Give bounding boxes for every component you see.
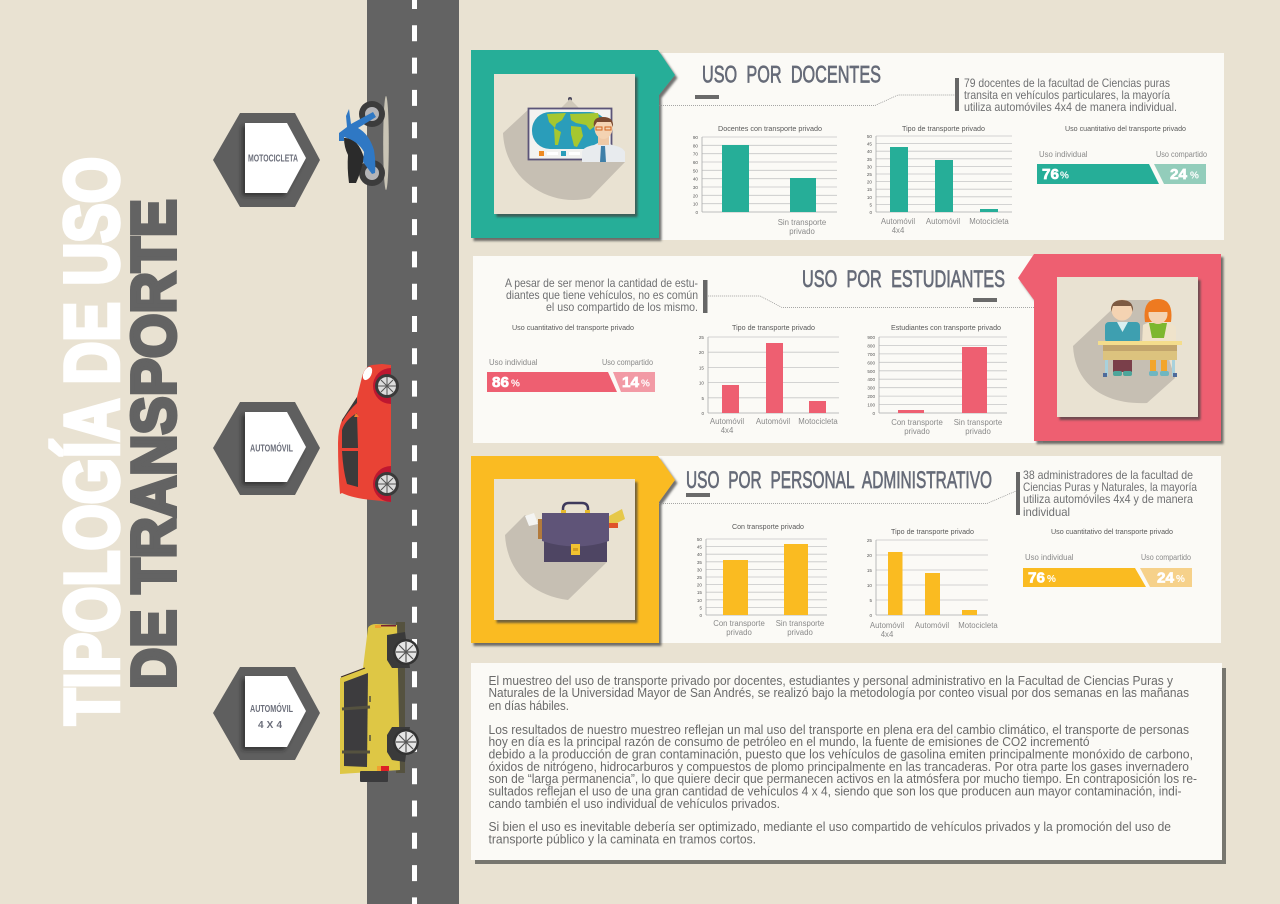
bar chart: tipo de transporte privado: Automóvil: [915, 621, 949, 630]
share bar: uso cuantitativo: 14: [622, 375, 639, 391]
text block: individual: [1023, 505, 1070, 519]
bar chart: estudiantes con transporte privado: Sin transporte: [954, 418, 1002, 427]
bar chart: tipo de transporte privado: Automóvil: [926, 217, 960, 226]
text block: transita en vehículos particulares, la mayoría: [964, 88, 1170, 102]
bar chart: estudiantes con transporte privado: 500: [867, 369, 875, 374]
bar chart: estudiantes con transporte privado: 700: [867, 352, 875, 357]
share bar: uso cuantitativo: Uso cuantitativo del transporte privado: [1065, 124, 1186, 133]
hexagon label: automóvil 4x4: [213, 667, 320, 760]
bar chart: tipo de transporte privado: 25: [867, 538, 872, 543]
bar chart: tipo de transporte privado: 15: [699, 365, 704, 370]
bar chart: tipo de transporte privado: [867, 124, 1012, 235]
panel: conclusions text: cando también el uso individual de vehículos privados.: [488, 797, 780, 811]
bar chart: con transporte privado: privado: [726, 628, 752, 637]
hexagon label: automóvil: [213, 402, 320, 495]
share bar: uso cuantitativo: Uso individual: [1039, 150, 1088, 159]
panel: conclusions text: Naturales de la Universidad Mayor de San Andrés, se realizó bajo la metodología por conteo visual por dos semanas en las mañanas: [488, 686, 1189, 700]
panel: conclusions text: son de “larga permanencia”, lo que quiere decir que permanecen activos en la atmósfera por mucho tiempo. En contraposición los re-: [488, 772, 1197, 786]
bar chart: estudiantes con transporte privado: privado: [965, 427, 991, 436]
heading: USO POR DOCENTES: [702, 62, 881, 88]
share bar: uso cuantitativo: Uso compartido: [1141, 553, 1192, 562]
share bar: uso cuantitativo: Uso cuantitativo del transporte privado: [512, 323, 634, 332]
share bar: uso cuantitativo: %: [1060, 170, 1069, 182]
bar chart: con transporte privado: [697, 522, 827, 637]
bar chart: con transporte privado: 45: [697, 545, 702, 550]
text block: 79 docentes de la facultad de Ciencias puras: [964, 76, 1170, 90]
bar chart: tipo de transporte privado: 0: [869, 613, 872, 618]
bar chart: docentes con transporte privado: 70: [693, 152, 698, 157]
bar chart: tipo de transporte privado: Tipo de transporte privado: [902, 124, 985, 133]
yellow tab: [471, 456, 675, 643]
text block: A pesar de ser menor la cantidad de estu-: [505, 276, 698, 290]
bar chart: tipo de transporte privado: Automóvil: [881, 217, 915, 226]
road: [367, 0, 459, 904]
share bar: uso cuantitativo: Uso compartido: [602, 358, 654, 367]
bar chart: docentes con transporte privado: 10: [693, 202, 698, 207]
bar chart: con transporte privado: Con transporte privado: [732, 522, 804, 531]
panel: conclusions text: [471, 663, 1226, 864]
bar chart: con transporte privado: 30: [697, 567, 702, 572]
bar chart: tipo de transporte privado: 5: [869, 202, 872, 207]
text block: el uso compartido de los mismo.: [546, 300, 698, 314]
share bar: uso cuantitativo: [1037, 124, 1208, 184]
bar chart: tipo de transporte privado: [699, 323, 839, 435]
bar chart: tipo de transporte privado: 25: [699, 335, 704, 340]
bar chart: estudiantes con transporte privado: 100: [867, 403, 875, 408]
panel: conclusions text: en días hábiles.: [488, 699, 569, 713]
icon: students at desk: [1057, 277, 1198, 417]
title: tipología de uso de transporte: TIPOLOGÍA DE USO: [50, 157, 135, 725]
bar chart: docentes con transporte privado: 50: [693, 168, 698, 173]
bar chart: con transporte privado: 0: [699, 613, 702, 618]
bar chart: tipo de transporte privado: Motocicleta: [958, 621, 998, 630]
bar chart: tipo de transporte privado: 20: [699, 350, 704, 355]
panel: conclusions text: óxidos de nitrógeno, hidrocarburos y compuestos de plomo principalmente en las trancaderas. Por otra parte los gases invernadero: [488, 760, 1189, 774]
bar chart: estudiantes con transporte privado: 0: [872, 411, 875, 416]
bar chart: docentes con transporte privado: 80: [693, 143, 698, 148]
bar chart: tipo de transporte privado: Automóvil: [710, 417, 744, 426]
bar chart: tipo de transporte privado: 0: [701, 411, 704, 416]
bar chart: estudiantes con transporte privado: 200: [867, 394, 875, 399]
bar chart: tipo de transporte privado: 10: [699, 381, 704, 386]
bar chart: estudiantes con transporte privado: Estudiantes con transporte privado: [891, 323, 1001, 332]
icon: teacher with world map: [494, 74, 635, 214]
pink tab: [1018, 254, 1221, 441]
icon: briefcase: [494, 479, 635, 620]
bar chart: docentes con transporte privado: 20: [693, 193, 698, 198]
text block: [964, 76, 1177, 114]
heading: USO POR ESTUDIANTES: [802, 266, 1005, 293]
share bar: uso cuantitativo: 24: [1157, 570, 1174, 586]
panel: conclusions text: sultados reflejan el uso de una gran cantidad de vehículos 4 x 4, siendo que son los que producen aun mayor contaminación, indi-: [488, 784, 1182, 798]
bar chart: docentes con transporte privado: 0: [695, 210, 698, 215]
icon: yellow 4x4: [340, 622, 419, 782]
bar chart: estudiantes con transporte privado: privado: [904, 427, 930, 436]
hexagon label: automóvil 4x4: AUTOMÓVIL: [250, 702, 293, 715]
panel: conclusions text: debido a la producción de gran contaminación, puesto que los vehículos de gasolina emiten principalmente monóxido de carbono,: [488, 748, 1193, 762]
bar chart: con transporte privado: 15: [697, 590, 702, 595]
bar chart: tipo de transporte privado: 20: [867, 180, 872, 185]
panel: uso por personal administrativo: [471, 456, 1221, 643]
share bar: uso cuantitativo: Uso individual: [1025, 553, 1074, 562]
share bar: uso cuantitativo: 24: [1170, 167, 1187, 183]
share bar: uso cuantitativo: %: [511, 378, 520, 390]
bar chart: estudiantes con transporte privado: 900: [867, 335, 875, 340]
bar chart: tipo de transporte privado: Motocicleta: [969, 217, 1009, 226]
bar chart: tipo de transporte privado: 35: [867, 157, 872, 162]
bar chart: docentes con transporte privado: Docentes con transporte privado: [718, 124, 822, 133]
share bar: uso cuantitativo: 86: [492, 375, 509, 391]
share bar: uso cuantitativo: [487, 323, 655, 392]
text block: [1023, 468, 1197, 519]
bar chart: tipo de transporte privado: Automóvil: [870, 621, 904, 630]
panel: conclusions text: Los resultados de nuestro muestreo reflejan un mal uso del transporte en plena era del cambio climático, el transporte de personas: [488, 723, 1189, 737]
bar chart: tipo de transporte privado: Motocicleta: [798, 417, 838, 426]
title: tipología de uso de transporte: DE TRANSPORTE: [120, 199, 189, 689]
share bar: uso cuantitativo: %: [641, 378, 650, 390]
bar chart: estudiantes con transporte privado: 800: [867, 343, 875, 348]
share bar: uso cuantitativo: 76: [1028, 570, 1045, 586]
share bar: uso cuantitativo: %: [1176, 574, 1185, 585]
bar chart: docentes con transporte privado: privado: [789, 227, 815, 236]
bar chart: docentes con transporte privado: 90: [693, 135, 698, 140]
heading: USO POR PERSONAL ADMINISTRATIVO: [686, 467, 992, 494]
panel: conclusions text: Si bien el uso es inevitable debería ser optimizado, mediante el uso compartido de vehículos privados y la promoción del uso de: [488, 820, 1171, 834]
bar chart: tipo de transporte privado: 10: [867, 583, 872, 588]
teal tab: [471, 50, 675, 238]
bar chart: docentes con transporte privado: 30: [693, 185, 698, 190]
text block: utiliza automóviles 4x4 de manera individual.: [964, 100, 1177, 114]
icon: red car: [338, 364, 399, 502]
bar chart: tipo de transporte privado: 40: [867, 149, 872, 154]
bar chart: estudiantes con transporte privado: 600: [867, 360, 875, 365]
bar chart: tipo de transporte privado: Tipo de transporte privado: [732, 323, 815, 332]
title: tipología de uso de transporte: [50, 157, 189, 725]
bar chart: tipo de transporte privado: 4x4: [892, 226, 905, 235]
bar chart: tipo de transporte privado: 4x4: [881, 630, 894, 639]
bar chart: tipo de transporte privado: Automóvil: [756, 417, 790, 426]
hexagon label: motocicleta: [213, 113, 320, 207]
text block: Ciencias Puras y Naturales, la mayoría: [1023, 480, 1197, 494]
bar chart: con transporte privado: 25: [697, 575, 702, 580]
share bar: uso cuantitativo: 76: [1042, 167, 1059, 183]
bar chart: tipo de transporte privado: 4x4: [721, 426, 734, 435]
bar chart: docentes con transporte privado: 60: [693, 160, 698, 165]
bar chart: estudiantes con transporte privado: 400: [867, 377, 875, 382]
bar chart: docentes con transporte privado: Sin transporte: [778, 218, 826, 227]
bar chart: con transporte privado: 10: [697, 598, 702, 603]
hexagon label: automóvil 4x4: 4 X 4: [258, 720, 282, 731]
bar chart: con transporte privado: 40: [697, 552, 702, 557]
bar chart: tipo de transporte privado: 25: [867, 172, 872, 177]
bar chart: tipo de transporte privado: 50: [867, 134, 872, 139]
share bar: uso cuantitativo: Uso cuantitativo del transporte privado: [1051, 527, 1173, 536]
bar chart: tipo de transporte privado: 0: [869, 210, 872, 215]
panel: conclusions text: hoy en día es la principal razón de consumo de petróleo en el mundo, la fuente de emisiones de CO2 incrementó: [488, 735, 1090, 749]
bar chart: tipo de transporte privado: 5: [701, 396, 704, 401]
text block: utiliza automóviles 4x4 y de manera: [1023, 492, 1193, 506]
bar chart: estudiantes con transporte privado: Con transporte: [891, 418, 943, 427]
bar chart: tipo de transporte privado: Tipo de transporte privado: [891, 527, 974, 536]
text block: [505, 276, 698, 314]
bar chart: con transporte privado: 35: [697, 560, 702, 565]
bar chart: tipo de transporte privado: 5: [869, 598, 872, 603]
bar chart: con transporte privado: 5: [699, 605, 702, 610]
text block: 38 administradores de la facultad de: [1023, 468, 1193, 482]
icon: motorcycle: [339, 96, 389, 190]
share bar: uso cuantitativo: Uso individual: [489, 358, 538, 367]
text block: diantes que tiene vehículos, no es común: [506, 288, 698, 302]
bar chart: tipo de transporte privado: 30: [867, 164, 872, 169]
bar chart: tipo de transporte privado: 45: [867, 142, 872, 147]
share bar: uso cuantitativo: %: [1190, 170, 1199, 182]
bar chart: con transporte privado: privado: [787, 628, 813, 637]
bar chart: tipo de transporte privado: 10: [867, 195, 872, 200]
share bar: uso cuantitativo: Uso compartido: [1156, 150, 1208, 159]
bar chart: docentes con transporte privado: [693, 124, 837, 236]
hexagon label: motocicleta: MOTOCICLETA: [248, 154, 298, 164]
panel: conclusions text: El muestreo del uso de transporte privado por docentes, estudiantes y personal administrativo en la Facultad de Ciencias Puras y: [488, 674, 1174, 688]
share bar: uso cuantitativo: [1023, 527, 1192, 587]
panel: uso por estudiantes: [473, 254, 1221, 443]
bar chart: estudiantes con transporte privado: [867, 323, 1007, 436]
bar chart: con transporte privado: 20: [697, 583, 702, 588]
bar chart: con transporte privado: 50: [697, 537, 702, 542]
panel: conclusions text: transporte público y la caminata en tramos cortos.: [488, 832, 756, 846]
bar chart: tipo de transporte privado: 15: [867, 187, 872, 192]
hexagon label: automóvil: AUTOMÓVIL: [250, 442, 293, 454]
bar chart: con transporte privado: Con transporte: [713, 619, 765, 628]
bar chart: con transporte privado: Sin transporte: [776, 619, 824, 628]
bar chart: tipo de transporte privado: 20: [867, 553, 872, 558]
bar chart: tipo de transporte privado: [867, 527, 998, 639]
panel: uso por docentes: [471, 50, 1224, 240]
share bar: uso cuantitativo: %: [1047, 574, 1056, 585]
bar chart: tipo de transporte privado: 15: [867, 568, 872, 573]
bar chart: docentes con transporte privado: 40: [693, 177, 698, 182]
bar chart: estudiantes con transporte privado: 300: [867, 386, 875, 391]
